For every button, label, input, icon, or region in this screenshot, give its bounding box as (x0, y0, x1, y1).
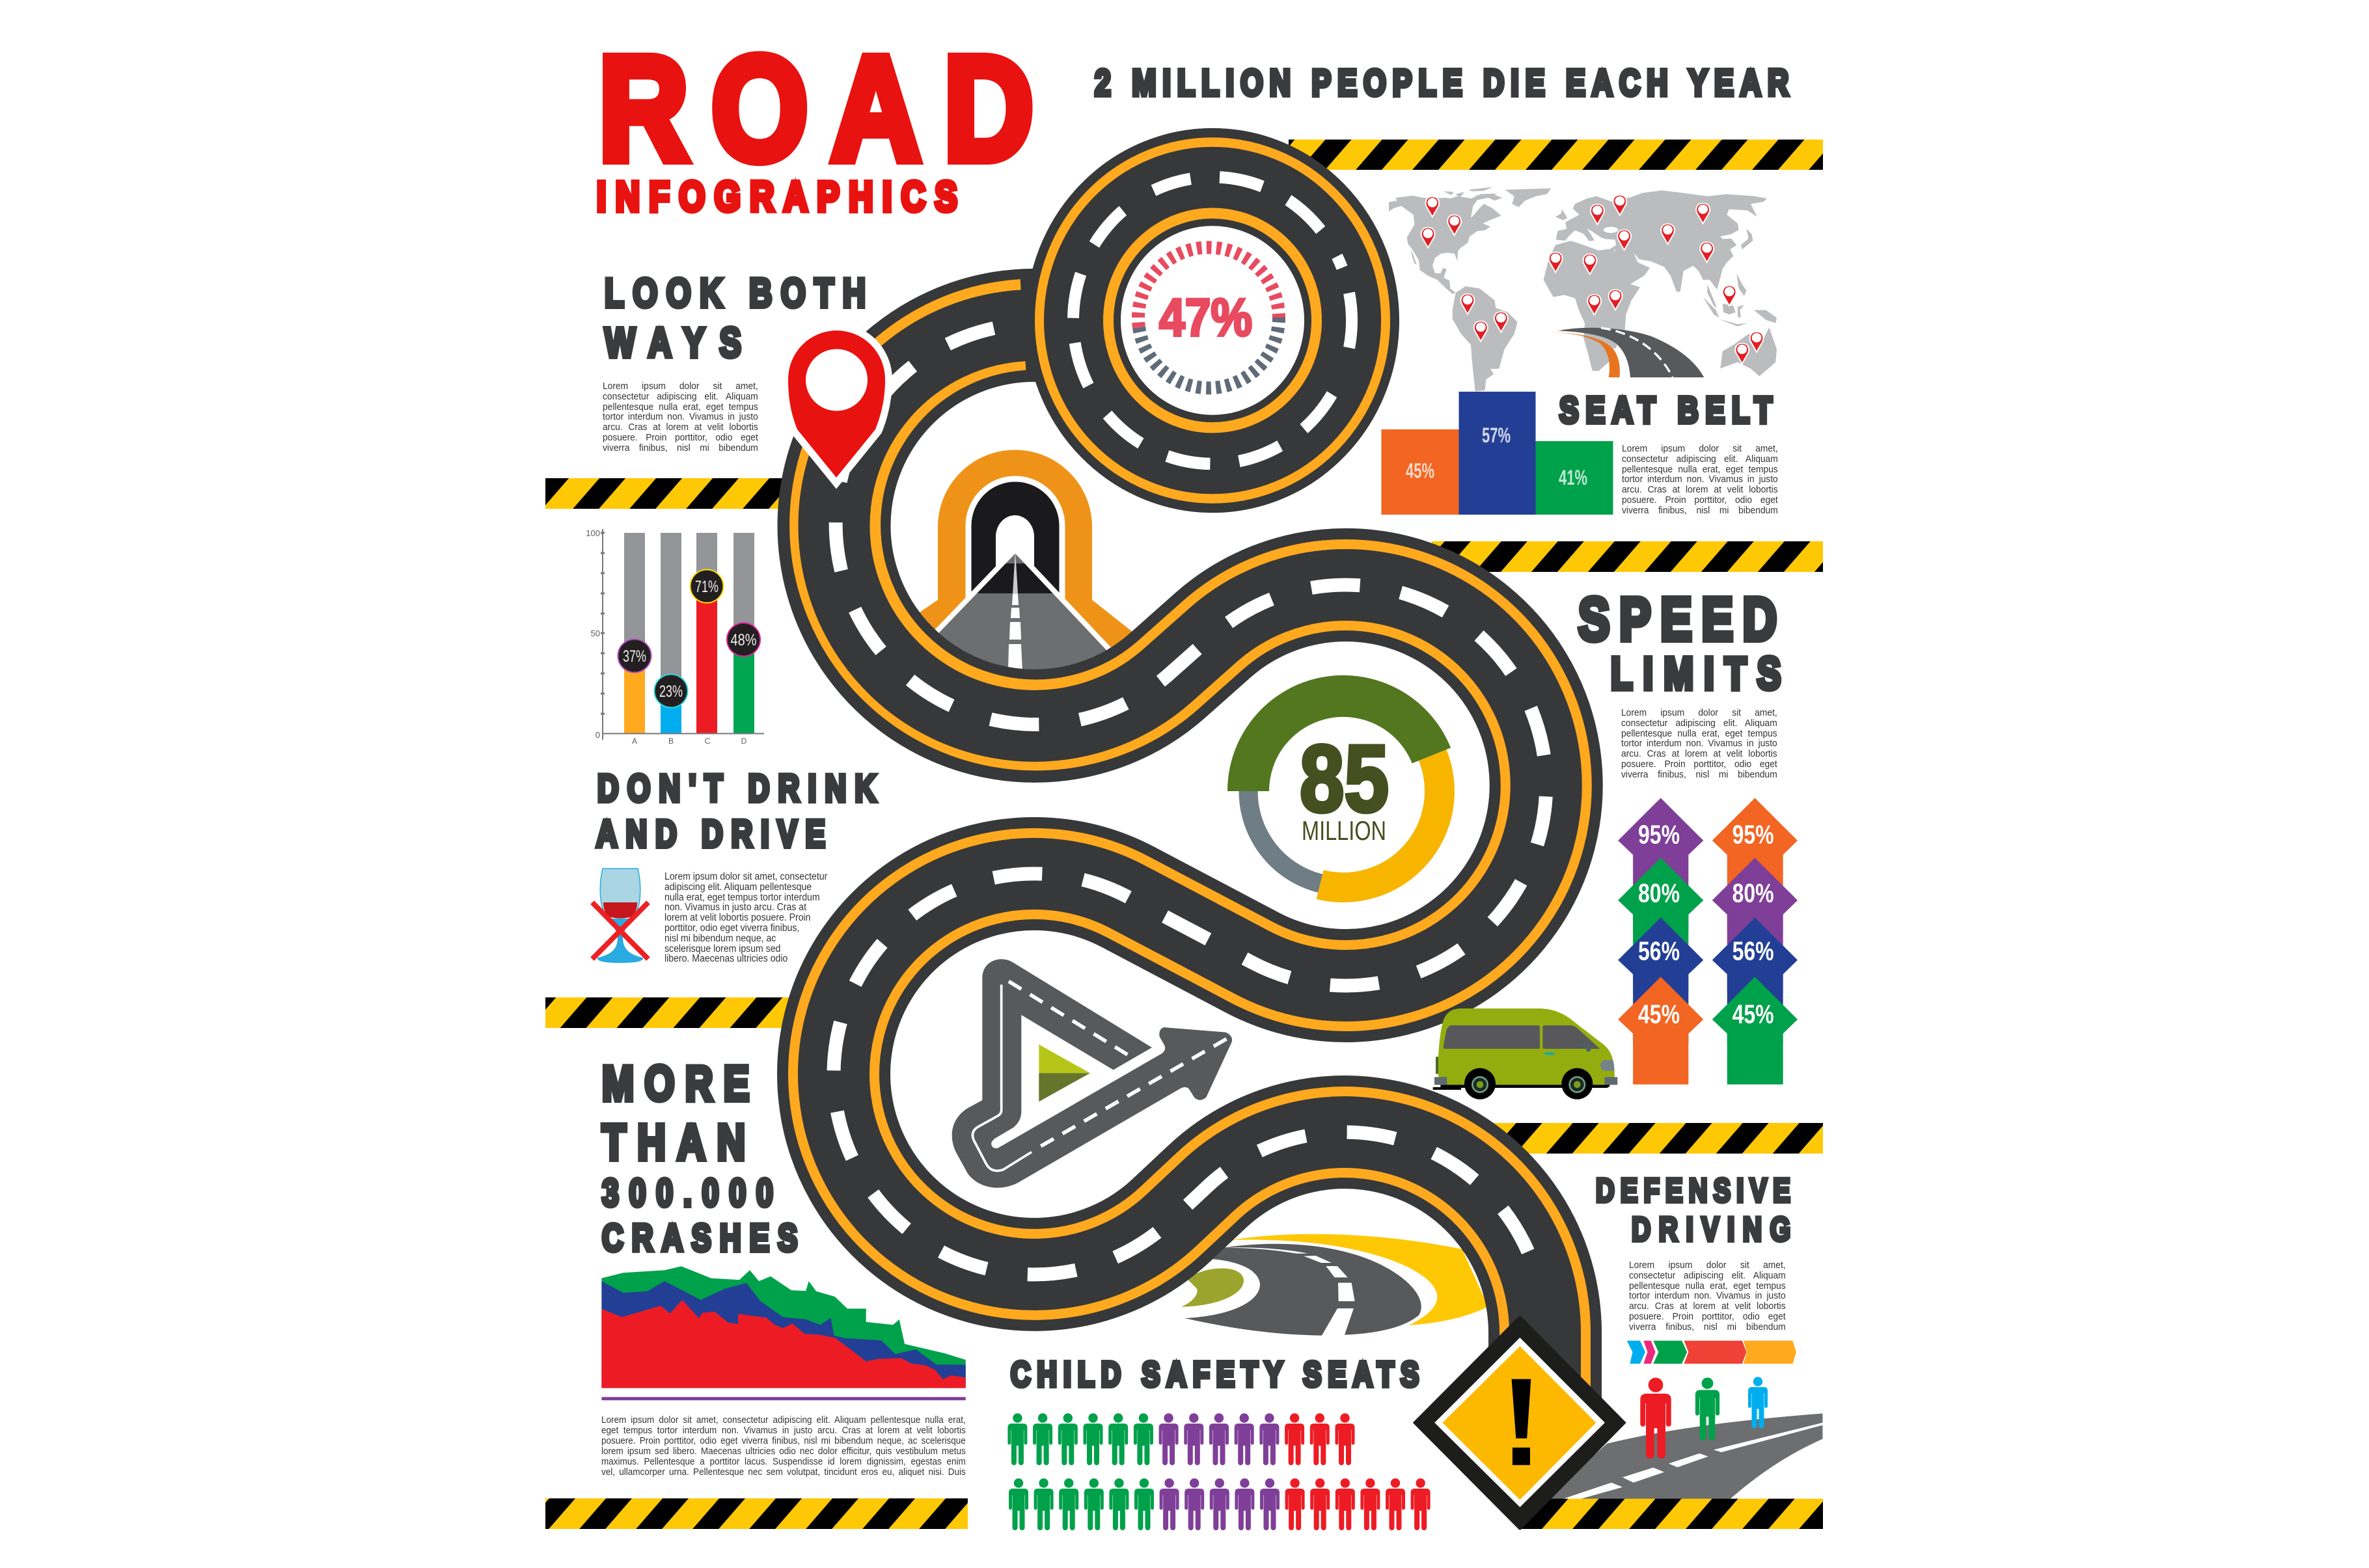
text: speed limits: consectetur adipiscing elit. Aliquam (1621, 718, 1777, 729)
arrow percentage labels: 56% (1638, 936, 1680, 966)
heading defensive driving: DRIVING (1632, 1210, 1790, 1248)
100-bar column chart: 0 (596, 730, 600, 740)
hazard stripe: left upper (545, 478, 794, 509)
text: defensive driving: viverra finibus, nisl mi bibendum (1629, 1321, 1786, 1332)
arrow percentage labels: 80% (1732, 878, 1774, 908)
heading look both ways: WAYS (605, 320, 741, 366)
text: seat belt: tortor interdum non. Vivamus in justo (1622, 474, 1778, 485)
heading defensive driving: DEFENSIVE (1596, 1172, 1790, 1209)
heading speed limits (1578, 586, 1781, 699)
text: speed limits: tortor interdum non. Vivamus in justo (1621, 738, 1777, 749)
hazard stripe: bottom right (1520, 1499, 1823, 1529)
text: crashes (601, 1414, 966, 1478)
heading more than crashes: THAN (602, 1114, 745, 1170)
title ROAD: ROAD (599, 26, 1034, 191)
text: dont drink: lorem at velit lobortis posuere. Proin (664, 912, 811, 923)
text: dont drink: nulla erat, eget tempus tortor interdum (664, 892, 820, 903)
value 85 million: MILLION (1302, 815, 1386, 846)
heading speed limits: LIMITS (1611, 649, 1781, 699)
85 million donut gauge (1248, 696, 1440, 887)
seat belt bar chart: 41% (1559, 466, 1587, 489)
text: look both ways: viverra finibus, nisl mi bibendum (603, 442, 758, 453)
wine glass icon crossed out (592, 869, 648, 963)
text: defensive driving (1629, 1260, 1786, 1332)
subtitle INFOGRAPHICS: INFOGRAPHICS (597, 174, 957, 220)
100-bar column chart: 48% (730, 631, 756, 649)
arrow percentage labels: 95% (1638, 820, 1680, 850)
top circular road with gauge ring (1039, 142, 1386, 498)
gauge value 47%: 47% (1159, 288, 1252, 347)
heading more than crashes (602, 1057, 797, 1260)
warning sign (1414, 1317, 1624, 1529)
text: look both ways: tortor interdum non. Vivamus in justo (603, 411, 758, 422)
text: dont drink: libero. Maecenas ultricies odio (664, 953, 787, 964)
arrow percentage labels (1638, 820, 1774, 1029)
text: speed limits: Lorem ipsum dolor sit amet, (1621, 707, 1777, 718)
arrow percentage labels: 45% (1638, 999, 1680, 1029)
perspective road with people (1546, 1414, 1822, 1499)
gauge ticks 47 percent (1138, 247, 1279, 388)
seat belt bar chart: 57% (1482, 424, 1511, 447)
text: look both ways (603, 381, 758, 453)
100-bar column chart: 23% (659, 683, 683, 701)
text: dont drink: adipiscing elit. Aliquam pellentesque (664, 882, 812, 893)
text: dont drink (664, 871, 828, 964)
arrow percentage labels: 56% (1732, 936, 1774, 966)
value 85 million: 85 (1300, 725, 1389, 831)
text: defensive driving: consectetur adipiscing elit. Aliquam (1629, 1270, 1786, 1281)
text: look both ways: consectetur adipiscing elit. Aliquam (603, 391, 758, 402)
location pin (788, 331, 885, 478)
heading look both ways (605, 270, 866, 366)
heading dont drink and drive: DON'T DRINK (597, 768, 877, 810)
pictogram row two (1009, 1478, 1431, 1530)
hazard stripe: defensive driving (1490, 1123, 1823, 1154)
100-bar column chart: 100 (586, 528, 600, 538)
text: speed limits: arcu. Cras at lorem at velit lobortis (1621, 748, 1777, 759)
text: defensive driving: pellentesque nulla erat, eget tempus (1629, 1280, 1786, 1291)
heading dont drink and drive (596, 768, 877, 856)
100-bar column chart: 50 (591, 629, 600, 638)
heading defensive driving (1596, 1172, 1790, 1248)
heading more than crashes: MORE (602, 1057, 749, 1111)
text: crashes: vel, ullamcorper urna. Pellentesque nec sem volutpat, tincidunt eros eu, aliquet nisi. Duis (601, 1467, 966, 1478)
three people on road (1640, 1377, 1768, 1459)
text: defensive driving: Lorem ipsum dolor sit amet, (1629, 1260, 1786, 1271)
100-bar column chart: C (705, 737, 711, 746)
chevron progress bar (1627, 1341, 1796, 1364)
text: look both ways: arcu. Cras at lorem at velit lobortis (603, 422, 758, 433)
100-bar column chart: 71% (695, 578, 719, 596)
text: speed limits: pellentesque nulla erat, eget tempus (1621, 728, 1777, 739)
hazard stripe: top right (1289, 139, 1823, 170)
hazard stripe: speed limits (1432, 541, 1823, 572)
text: speed limits (1621, 707, 1777, 780)
tunnel illustration (911, 450, 1136, 716)
triangle road icon with arrow (952, 959, 1232, 1188)
heading speed limits: SPEED (1578, 586, 1777, 653)
text: dont drink: nisl mi bibendum neque, ac (664, 933, 776, 944)
text: look both ways: Lorem ipsum dolor sit amet, (603, 381, 758, 392)
arrow percentage labels: 80% (1638, 878, 1680, 908)
100-bar column chart: 37% (623, 647, 646, 666)
hazard stripe: left middle (545, 997, 801, 1028)
hazard stripe: bottom left (545, 1498, 968, 1529)
text: look both ways: posuere. Proin porttitor, odio eget (603, 432, 758, 443)
heading more than crashes: 300.000 (602, 1172, 773, 1215)
seat belt bar chart: 45% (1406, 459, 1434, 483)
text: crashes: eget tempus tortor interdum non. Vivamus in justo arcu. Cras at lorem at velit lobortis (601, 1425, 966, 1436)
text: seat belt: posuere. Proin porttitor, odio eget (1622, 494, 1778, 506)
green van (1433, 1008, 1617, 1100)
text: dont drink: porttitor, odio eget viverra finibus, (664, 923, 799, 934)
heading look both ways: LOOK BOTH (605, 270, 866, 316)
text: dont drink: scelerisque lorem ipsum sed (664, 943, 780, 954)
text: crashes: maximus. Pellentesque a porttitor lacus. Suspendisse id lorem dignissim, egestas enim (601, 1456, 966, 1467)
headline 2 million: 2 MILLION PEOPLE DIE EACH YEAR (1095, 62, 1788, 103)
text: seat belt: viverra finibus, nisl mi bibendum (1622, 505, 1778, 516)
heading child safety seats: CHILD SAFETY SEATS (1011, 1355, 1419, 1394)
text: dont drink: Lorem ipsum dolor sit amet, consectetur (664, 871, 827, 882)
text: speed limits: viverra finibus, nisl mi bibendum (1621, 769, 1777, 780)
text: crashes: posuere. Proin porttitor, odio eget viverra finibus, nisl mi bibendum neque, ac scelerisque (601, 1435, 966, 1446)
world map with pins (1389, 187, 1777, 392)
heading dont drink and drive: AND DRIVE (596, 813, 825, 856)
100-bar column chart: A (632, 737, 637, 746)
main winding road (834, 325, 1546, 1412)
text: seat belt: pellentesque nulla erat, eget tempus (1622, 464, 1778, 475)
arrow percentage labels: 45% (1732, 999, 1774, 1029)
pictogram row one (1007, 1413, 1355, 1465)
text: crashes: Lorem ipsum dolor sit amet, consectetur adipiscing elit. Aliquam pellentesque nulla erat, (601, 1414, 966, 1426)
heading more than crashes: CRASHES (602, 1217, 797, 1260)
text: defensive driving: arcu. Cras at lorem at velit lobortis (1629, 1301, 1786, 1312)
text: crashes: lorem ipsum sed libero. Maecenas ultricies odio nec dolor efficitur, quis vestibulum metus (601, 1446, 966, 1457)
swoosh road illustration (1181, 1234, 1488, 1336)
100-bar column chart: B (668, 737, 674, 746)
text: defensive driving: posuere. Proin porttitor, odio eget (1629, 1311, 1786, 1322)
heading seat belt: SEAT BELT (1559, 389, 1772, 431)
arrow percentage labels: 95% (1732, 820, 1774, 850)
speed limit arrow stacks (1618, 798, 1798, 1085)
text: seat belt: arcu. Cras at lorem at velit lobortis (1622, 484, 1778, 495)
layered area chart (601, 1266, 966, 1400)
text: defensive driving: tortor interdum non. Vivamus in justo (1629, 1290, 1786, 1301)
text: seat belt (1622, 443, 1778, 516)
seat belt bar chart (1381, 392, 1613, 515)
text: speed limits: posuere. Proin porttitor, odio eget (1621, 759, 1777, 770)
text: seat belt: Lorem ipsum dolor sit amet, (1622, 443, 1778, 454)
text: look both ways: pellentesque nulla erat, eget tempus (603, 401, 758, 412)
100-bar column chart (586, 528, 764, 746)
text: dont drink: non. Vivamus in justo arcu. Cras at (664, 902, 806, 913)
text: seat belt: consectetur adipiscing elit. Aliquam (1622, 453, 1778, 465)
100-bar column chart: D (741, 737, 747, 746)
